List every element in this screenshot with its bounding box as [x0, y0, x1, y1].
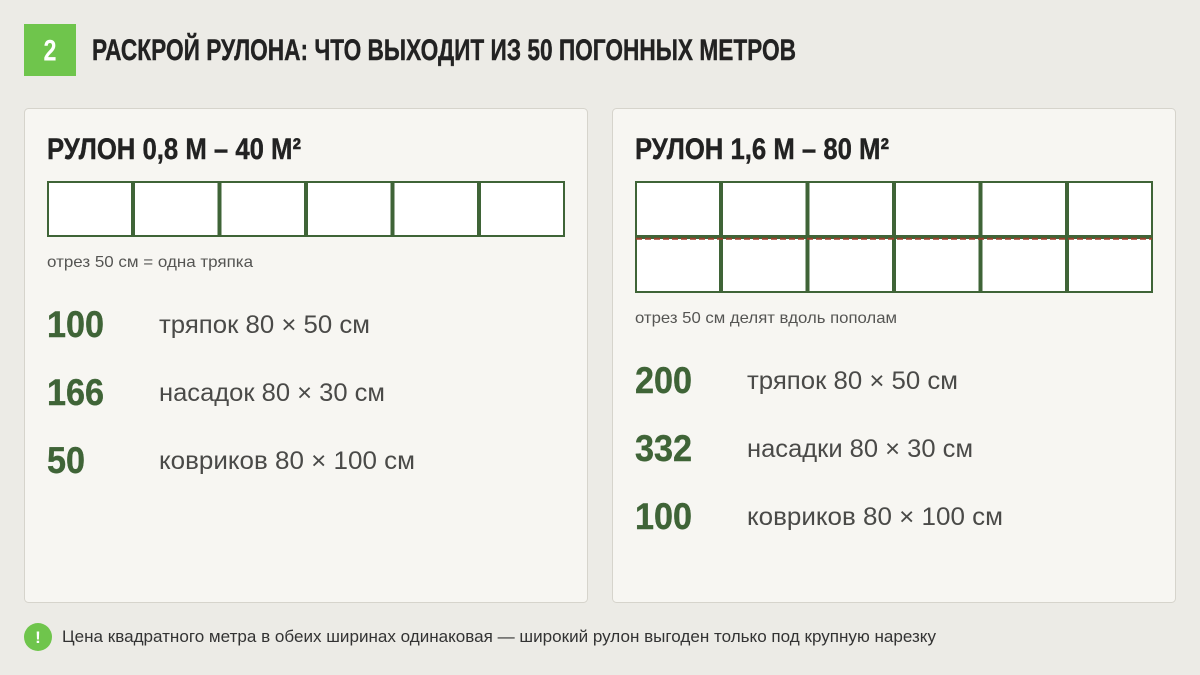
stat: mats: ковриков 80 × 100 см — [747, 503, 1003, 531]
diagram caption: отрез 50 см = одна тряпка — [47, 254, 253, 271]
stat: rags: тряпок 80 × 50 см — [747, 367, 958, 395]
icon: exclamation mark: ! — [35, 628, 41, 647]
stat: mop pads — [47, 372, 385, 413]
roll cut diagram with lengthwise split — [635, 181, 1153, 293]
stat: rags: 200 — [635, 360, 692, 401]
title: РАСКРОЙ РУЛОНА: ЧТО ВЫХОДИТ ИЗ 50 ПОГОННЫХ МЕТРОВ — [92, 33, 796, 67]
stat: rags: тряпок 80 × 50 см — [159, 311, 370, 339]
panel: roll 1.6 m — [612, 108, 1176, 602]
stat: mop pads: 166 — [47, 372, 104, 413]
stat: mop pads — [635, 428, 973, 469]
stat: mats — [47, 440, 415, 481]
stat: mop pads: 332 — [635, 428, 692, 469]
stat: mats: 100 — [635, 496, 692, 537]
section number badge: 2 — [44, 34, 56, 68]
panel heading: РУЛОН 0,8 М – 40 М² — [47, 133, 301, 166]
stat: rags: 100 — [47, 304, 104, 345]
stat: rags — [635, 360, 958, 401]
section number badge — [24, 24, 76, 76]
stat: mop pads: насадки 80 × 30 см — [747, 435, 973, 463]
panel: roll 0.8 m — [24, 108, 588, 602]
diagram caption: отрез 50 см делят вдоль пополам — [635, 310, 897, 327]
stat: mats — [635, 496, 1003, 537]
stat: mats: 50 — [47, 440, 85, 481]
panel heading: РУЛОН 1,6 М – 80 М² — [635, 133, 889, 166]
stat: mats: ковриков 80 × 100 см — [159, 447, 415, 475]
footnote: Цена квадратного метра в обеих ширинах одинаковая — широкий рулон выгоден только под крупную нарезку — [62, 627, 936, 646]
stat: mop pads: насадок 80 × 30 см — [159, 379, 385, 407]
icon: exclamation mark — [24, 623, 52, 651]
stat: rags — [47, 304, 370, 345]
roll cut diagram — [48, 181, 564, 237]
